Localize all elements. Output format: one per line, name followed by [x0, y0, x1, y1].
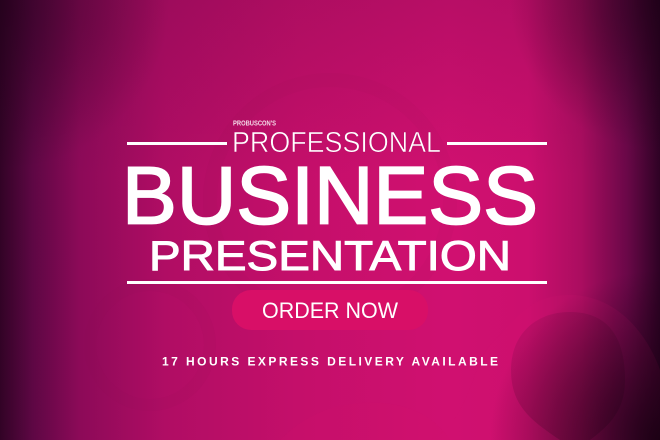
- heading rule left: [127, 142, 227, 145]
- heading rule right: [447, 142, 547, 145]
- heading: business: BUSINESS: [122, 150, 538, 242]
- delivery note: 17 HOURS EXPRESS DELIVERY AVAILABLE: [162, 354, 498, 368]
- divider rule: [127, 281, 547, 284]
- button: order now: [232, 290, 428, 330]
- button: order now: ORDER NOW: [262, 298, 398, 323]
- heading: brand: PROBUSCON'S: [233, 120, 276, 128]
- heading: presentation: PRESENTATION: [149, 232, 511, 279]
- heading: professional: PROFESSIONAL: [232, 127, 441, 159]
